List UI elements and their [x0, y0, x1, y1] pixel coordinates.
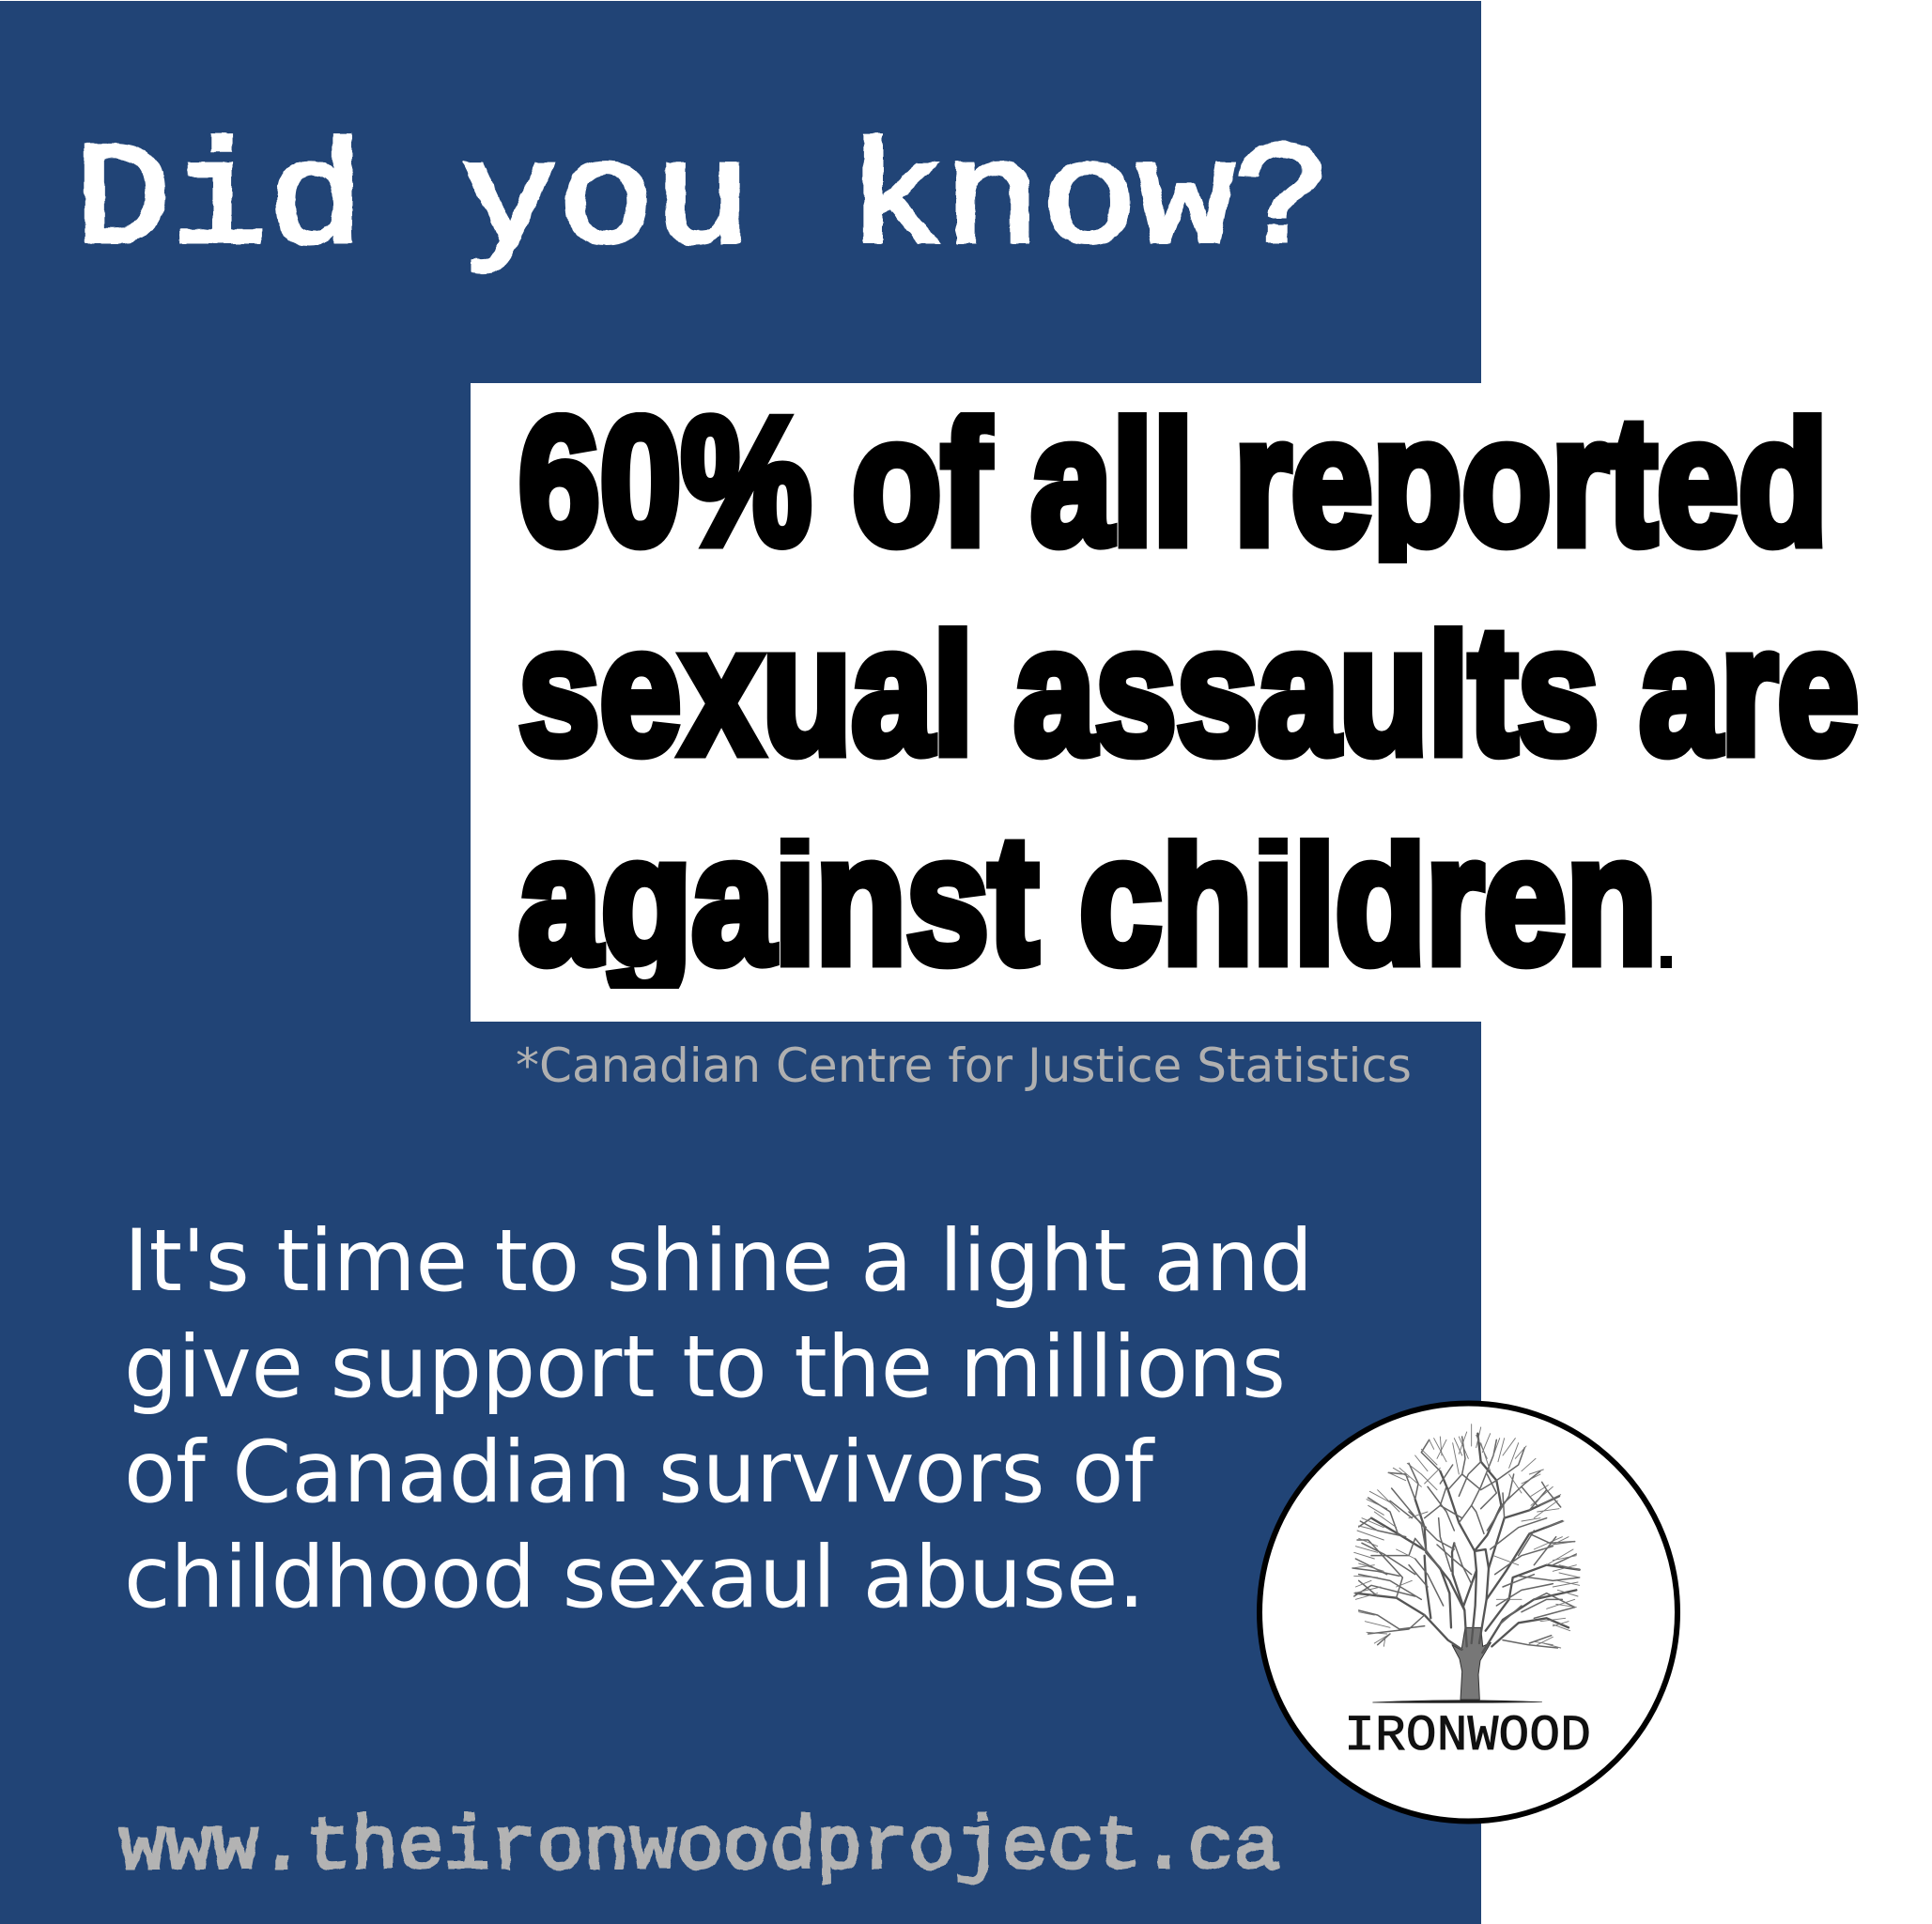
logo wordmark: IRONWOOD — [1344, 1708, 1591, 1765]
main limbs — [1355, 1434, 1580, 1653]
message line 2: give support to the millions — [124, 1318, 1286, 1417]
statistic headline — [518, 379, 1859, 1001]
badge circle — [1260, 1403, 1677, 1822]
supporting message — [124, 1212, 1313, 1627]
ground line — [1373, 1701, 1542, 1702]
white statistic panel — [471, 383, 1481, 1022]
outer twigs — [1352, 1424, 1580, 1648]
website url: www.theironwoodproject.ca — [119, 1806, 1280, 1891]
heading: Did you know?: Did you know? — [74, 120, 1331, 285]
headline period — [1661, 956, 1672, 968]
message line 1: It's time to shine a light and — [124, 1212, 1313, 1311]
tree trunk — [1452, 1627, 1491, 1700]
secondary branches — [1352, 1437, 1580, 1648]
Ironwood logo badge — [1260, 1403, 1677, 1822]
headline line 3: against children — [518, 798, 1657, 1001]
blue background panel — [0, 1, 1481, 1924]
source citation: *Canadian Centre for Justice Statistics — [516, 1039, 1412, 1093]
message line 4: childhood sexaul abuse. — [124, 1529, 1145, 1627]
message line 3: of Canadian survivors of — [124, 1424, 1155, 1522]
icon: bare tree — [1352, 1424, 1580, 1702]
